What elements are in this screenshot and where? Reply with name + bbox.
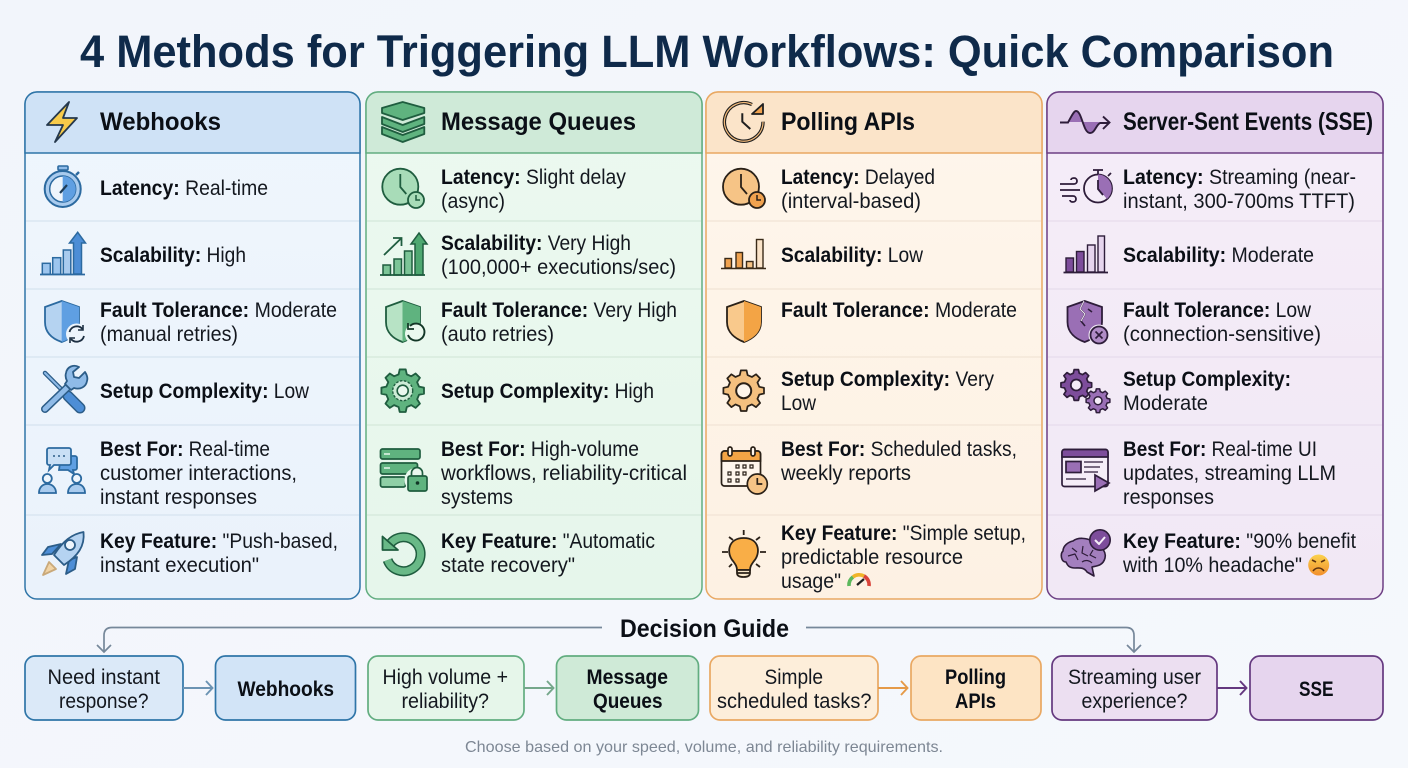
icon: stacked layers bbox=[382, 102, 424, 142]
panel: Server-Sent Events: responses bbox=[1123, 486, 1214, 509]
icon: gear bbox=[381, 369, 424, 412]
icon: polling clock bbox=[724, 103, 763, 141]
text: latency: Latency: Streaming (near- bbox=[1123, 166, 1356, 189]
panel: Server-Sent Events: Moderate bbox=[1123, 392, 1208, 415]
panel: Webhooks: (manual retries) bbox=[100, 323, 238, 346]
heading: Message Queues: Message Queues bbox=[441, 108, 636, 136]
panel: Message Queues: systems bbox=[441, 486, 513, 509]
icon: light bulb bbox=[722, 530, 766, 577]
panel: Webhooks: instant responses bbox=[100, 486, 257, 509]
decision: streaming user experience: Streaming user bbox=[1068, 666, 1201, 689]
icon: signal wave bbox=[1060, 111, 1110, 133]
result: Polling APIs bbox=[911, 656, 1041, 720]
icon: stopwatch bbox=[45, 166, 81, 207]
result: SSE bbox=[1250, 656, 1383, 720]
result: Message Queues: Queues bbox=[593, 690, 662, 713]
panel: Server-Sent Events: (connection-sensitive) bbox=[1123, 323, 1321, 346]
result: Message Queues bbox=[556, 656, 698, 720]
icon: moderate bars bbox=[1064, 236, 1108, 272]
panel: Server-Sent Events: instant, 300-700ms TTFT) bbox=[1123, 190, 1355, 213]
arrow: guide to first question bbox=[97, 628, 602, 652]
text: setup complexity: Setup Complexity: High bbox=[441, 380, 654, 403]
panel: Message Queues bbox=[366, 92, 702, 599]
panel: Polling APIs: predictable resource bbox=[781, 546, 963, 569]
icon: stopwatch with speed lines bbox=[1060, 170, 1112, 202]
decision: simple scheduled tasks: Simple bbox=[764, 666, 823, 689]
text: fault tolerance: Fault Tolerance: Low bbox=[1123, 299, 1312, 322]
icon: speed gauge bbox=[849, 575, 869, 586]
heading: Webhooks: Webhooks bbox=[100, 108, 221, 136]
panel: Polling APIs bbox=[706, 92, 1042, 599]
icon: two gears bbox=[1061, 370, 1110, 413]
panel: Message Queues: (100,000+ executions/sec) bbox=[441, 256, 676, 279]
text: best for: Best For: Real-time UI bbox=[1123, 438, 1317, 461]
icon: lightning bolt bbox=[47, 102, 77, 142]
icon: brain with check bbox=[1061, 530, 1110, 576]
icon: circular recovery arrow bbox=[382, 536, 421, 571]
icon: wrench and screwdriver bbox=[45, 366, 87, 409]
decision: streaming user experience bbox=[1052, 656, 1217, 720]
icon: rocket bbox=[42, 532, 84, 575]
decision: streaming user experience: experience? bbox=[1082, 690, 1188, 713]
icon: calendar bbox=[722, 447, 767, 494]
text: key feature: Key Feature: "Automatic bbox=[441, 530, 655, 553]
text: key feature: Key Feature: "Push-based, bbox=[100, 530, 338, 553]
icon: low bars bbox=[721, 240, 766, 268]
result: Message Queues: Message bbox=[586, 666, 668, 689]
text: setup complexity: Setup Complexity: bbox=[1123, 368, 1291, 391]
panel: Server-Sent Events: updates, streaming LLM bbox=[1123, 462, 1336, 485]
section: decision guide bbox=[25, 615, 1383, 720]
result: Polling APIs: Polling bbox=[945, 666, 1006, 689]
text: best for: Best For: High-volume bbox=[441, 438, 639, 461]
decision: simple scheduled tasks bbox=[710, 656, 878, 720]
icon: browser stream bbox=[1062, 450, 1109, 491]
text: setup complexity: Setup Complexity: Low bbox=[100, 380, 310, 403]
result: Polling APIs: APIs bbox=[955, 690, 996, 713]
icon: shield with auto retry bbox=[386, 301, 427, 345]
panel: Message Queues: workflows, reliability-critical bbox=[440, 462, 687, 485]
text: fault tolerance: Fault Tolerance: Moderate bbox=[781, 299, 1017, 322]
decision: need instant response: Need instant bbox=[48, 666, 160, 689]
text: latency: Latency: Delayed bbox=[781, 166, 935, 189]
panel: Polling APIs: weekly reports bbox=[780, 462, 911, 485]
icon: rising bars bbox=[40, 232, 86, 274]
text: setup complexity: Setup Complexity: Very bbox=[781, 368, 994, 391]
panel: Server-Sent Events: with 10% headache" bbox=[1122, 554, 1302, 577]
panel: Polling APIs: Low bbox=[781, 392, 817, 415]
decision: simple scheduled tasks: scheduled tasks? bbox=[717, 690, 872, 713]
text: fault tolerance: Fault Tolerance: Very High bbox=[441, 299, 677, 322]
icon: shield with retry bbox=[45, 301, 87, 344]
result: SSE: SSE bbox=[1299, 678, 1334, 701]
arrow bbox=[524, 681, 554, 695]
arrow: guide to last question bbox=[806, 628, 1141, 652]
text: fault tolerance: Fault Tolerance: Moderate bbox=[100, 299, 337, 322]
icon: chat and users bbox=[39, 448, 85, 493]
icon: clock bbox=[723, 169, 765, 208]
panel: Message Queues: (async) bbox=[441, 190, 505, 213]
panel: Server-Sent Events bbox=[1047, 92, 1383, 599]
panel: Webhooks: instant execution" bbox=[100, 554, 259, 577]
text: key feature: Key Feature: "90% benefit bbox=[1123, 530, 1356, 553]
text: key feature: Key Feature: "Simple setup, bbox=[781, 522, 1026, 545]
icon: frowning emoji bbox=[1308, 554, 1329, 576]
decision: high volume and reliability bbox=[368, 656, 524, 720]
text: scalability: Scalability: High bbox=[100, 244, 246, 267]
decision: need instant response: response? bbox=[59, 690, 148, 713]
text: scalability: Scalability: Moderate bbox=[1123, 244, 1314, 267]
icon: shield bbox=[727, 301, 761, 342]
panel: Message Queues: (auto retries) bbox=[441, 323, 554, 346]
result: Webhooks bbox=[216, 656, 356, 720]
heading: Polling APIs: Polling APIs bbox=[781, 108, 915, 136]
decision: high volume and reliability: High volume + bbox=[382, 666, 508, 689]
panel: Webhooks: customer interactions, bbox=[100, 462, 297, 485]
icon: server with lock bbox=[380, 449, 430, 492]
text: latency: Latency: Real-time bbox=[100, 177, 268, 200]
heading: Decision Guide: Decision Guide bbox=[620, 615, 789, 643]
panel: Polling APIs: (interval-based) bbox=[781, 190, 921, 213]
text: latency: Latency: Slight delay bbox=[441, 166, 626, 189]
text: best for: Best For: Real-time bbox=[100, 438, 270, 461]
panel: Webhooks bbox=[25, 92, 360, 599]
icon: clock bbox=[382, 169, 424, 208]
arrow bbox=[878, 681, 908, 695]
decision: high volume and reliability: reliability? bbox=[402, 690, 489, 713]
panel: Message Queues: state recovery" bbox=[441, 554, 575, 577]
icon: gear bbox=[723, 370, 764, 411]
decision: need instant response bbox=[25, 656, 183, 720]
text: scalability: Scalability: Very High bbox=[441, 232, 631, 255]
result: Webhooks: Webhooks bbox=[238, 678, 334, 701]
text: scalability: Scalability: Low bbox=[781, 244, 924, 267]
arrow bbox=[1217, 681, 1246, 695]
icon: rising bars with trend arrow bbox=[380, 233, 427, 275]
title: 4 Methods for Triggering LLM Workflows: Quick Comparison bbox=[80, 26, 1334, 77]
text: best for: Best For: Scheduled tasks, bbox=[781, 438, 1017, 461]
icon: broken shield bbox=[1068, 301, 1110, 346]
panel: Polling APIs: usage" bbox=[781, 570, 841, 593]
arrow bbox=[183, 681, 212, 695]
footer note: Choose based on your speed, volume, and reliability requirements. bbox=[465, 739, 943, 756]
